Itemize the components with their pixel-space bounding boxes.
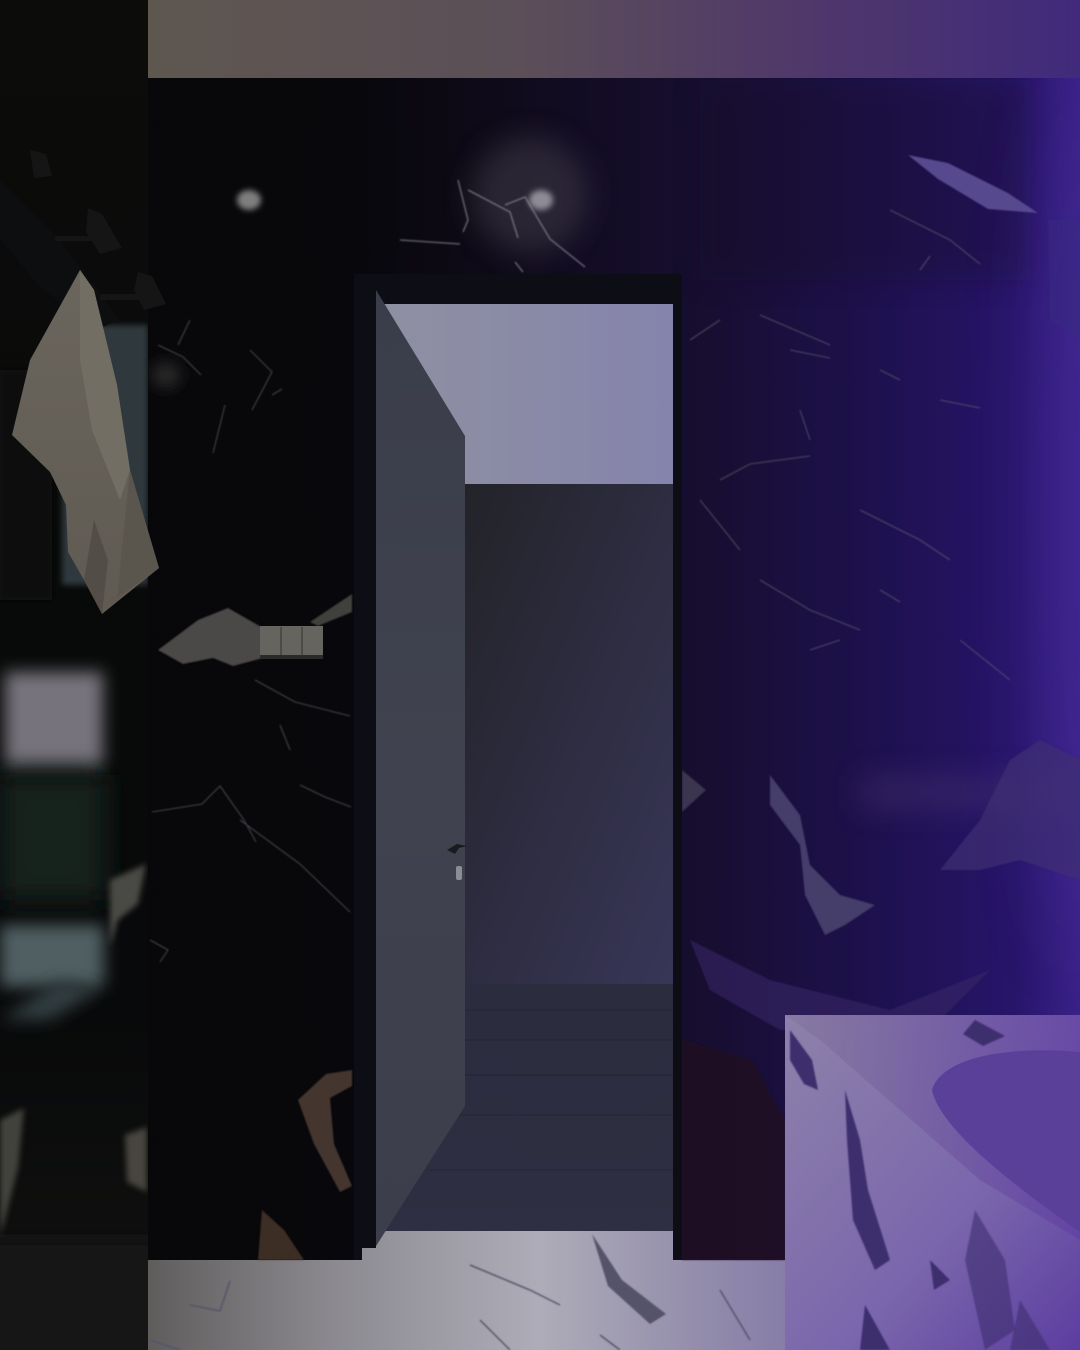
door handle <box>447 844 467 880</box>
left blurred foreground panel <box>0 0 180 1350</box>
corridor floor <box>376 984 673 1246</box>
light switch <box>260 626 323 659</box>
open door leaf <box>376 290 465 1246</box>
doorway opening <box>354 274 682 1260</box>
marble bathtub <box>785 1015 1080 1350</box>
white marble floor <box>148 1231 1080 1350</box>
far wall <box>465 484 673 986</box>
wall hooks <box>0 150 166 328</box>
door frame top and sides <box>354 274 682 1260</box>
hanging towel <box>12 270 159 614</box>
ceiling beyond door <box>376 304 673 484</box>
top ceiling strip <box>148 0 1080 78</box>
marble veins <box>150 180 1010 962</box>
marble patches on the walls <box>158 155 1080 1260</box>
tub basin <box>932 1050 1080 1232</box>
